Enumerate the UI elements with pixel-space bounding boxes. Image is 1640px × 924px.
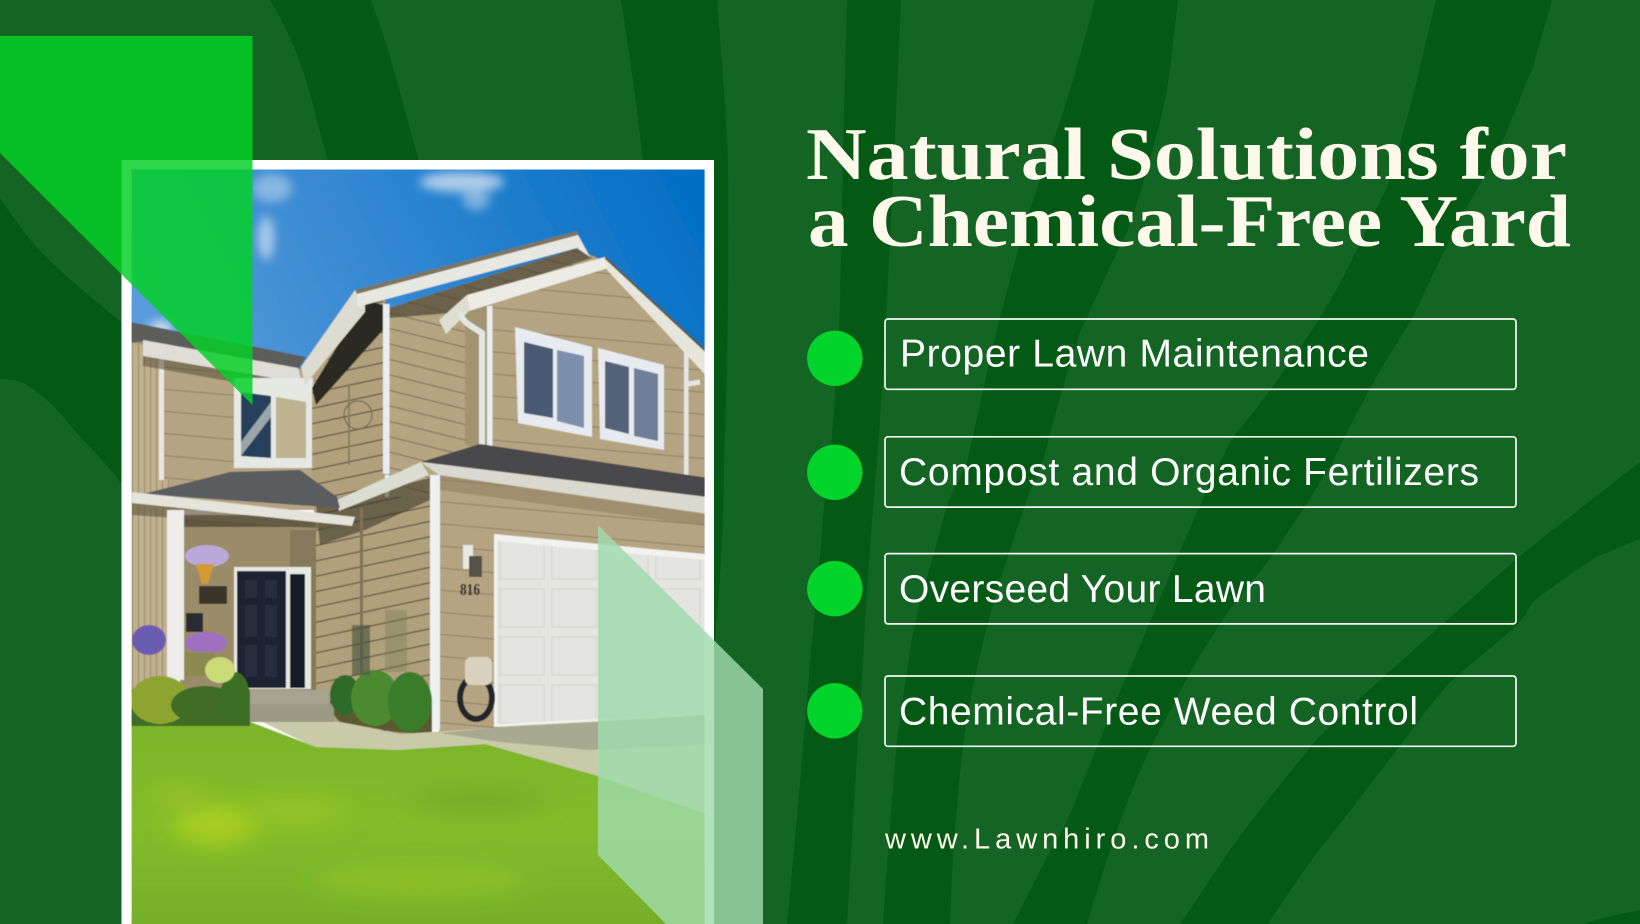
list item 3: Overseed Your Lawn xyxy=(807,554,1516,624)
title: Natural Solutions for xyxy=(806,114,1567,196)
translucent bright green triangle, top left xyxy=(0,36,252,405)
garden hose reel xyxy=(460,657,492,719)
photo frame: white border xyxy=(122,160,714,924)
left wing wall xyxy=(125,295,385,510)
list item 1: Proper Lawn Maintenance xyxy=(807,319,1516,389)
upper windows xyxy=(515,327,664,450)
lower left wall xyxy=(314,478,432,737)
diagonal siding bay xyxy=(312,297,383,500)
side wall by porch xyxy=(132,480,170,690)
list item 1: Proper Lawn Maintenance: Proper Lawn Maintenance xyxy=(900,333,1369,376)
porch decor: planter, sign, mailbox, flowers xyxy=(132,545,229,676)
list item 3: Overseed Your Lawn: Overseed Your Lawn xyxy=(899,568,1266,611)
mulch bed beside wall xyxy=(320,700,432,735)
paths and driveway xyxy=(262,721,704,813)
list item 4: Chemical-Free Weed Control xyxy=(807,676,1516,746)
left window xyxy=(234,378,313,468)
house photo xyxy=(125,165,715,924)
upper eave fascia xyxy=(301,231,590,474)
list item 2: Compost and Organic Fertilizers xyxy=(807,437,1516,507)
middle gable wall xyxy=(389,248,715,500)
list item 2: Compost and Organic Fertilizers: Compost and Organic Fertilizers xyxy=(899,451,1479,494)
lawn xyxy=(125,720,715,924)
porch recess xyxy=(180,515,316,705)
lower right wall xyxy=(439,470,715,735)
garage door xyxy=(494,534,715,727)
title: a Chemical-Free Yard xyxy=(808,181,1571,263)
list item 4: Chemical-Free Weed Control: Chemical-Free Weed Control xyxy=(899,690,1418,734)
front steps xyxy=(245,690,334,722)
house number: 816 xyxy=(460,580,480,599)
porch roof xyxy=(132,470,355,530)
website url: www.Lawnhiro.com xyxy=(884,824,1209,856)
front gable wall xyxy=(438,256,705,470)
sky with clouds xyxy=(125,165,710,475)
title xyxy=(806,114,1571,263)
translucent pale green shape, bottom of photo xyxy=(598,525,763,924)
downspout and trim xyxy=(461,306,700,482)
front door xyxy=(234,567,311,689)
upper left roof xyxy=(132,322,306,382)
porch column xyxy=(167,510,184,680)
lower eave roof and fascia xyxy=(337,444,715,730)
wall lamp xyxy=(463,545,482,577)
shrubs xyxy=(125,610,432,732)
